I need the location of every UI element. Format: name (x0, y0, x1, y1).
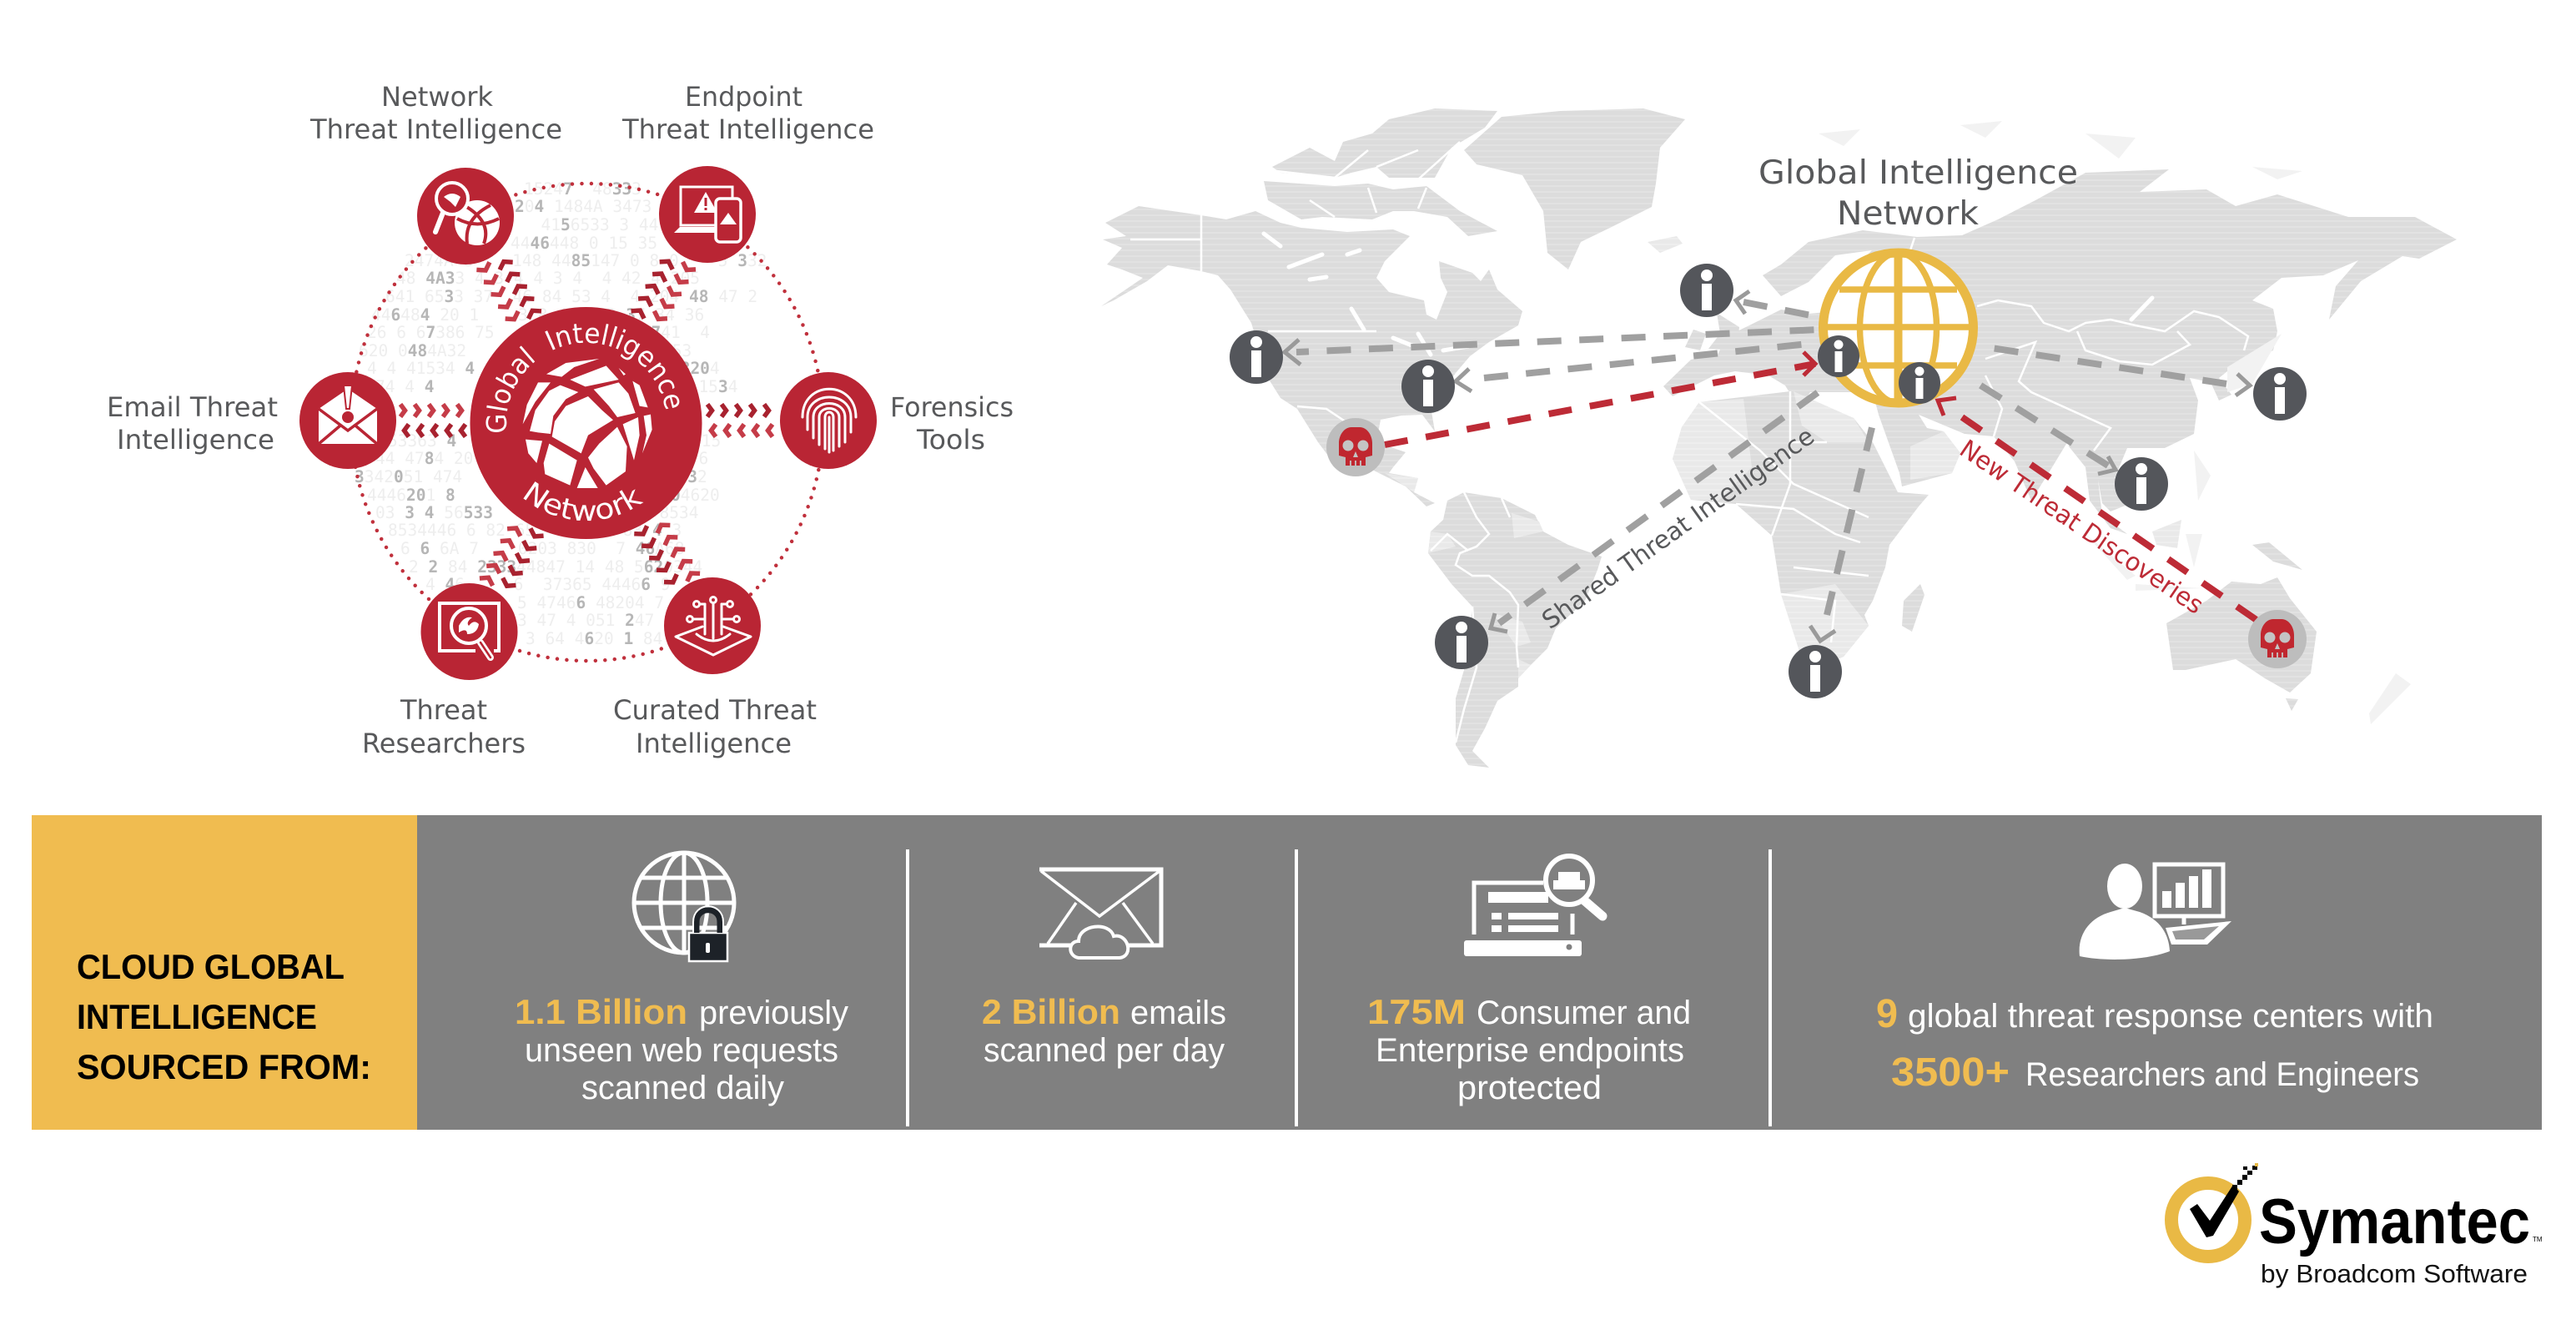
text: 2 Billion (982, 992, 1226, 1069)
label: Network Threat Intelligence: Threat Intelligence (309, 113, 562, 145)
background digit pattern: 6 6 6A 7 0203 830 7 46A68 (400, 539, 684, 558)
text: 2 Billion: emails (1130, 995, 1226, 1031)
text: 1.1 Billion: unseen web requests (525, 1032, 838, 1069)
label: Network Threat Intelligence (309, 81, 562, 145)
label: Curated Threat Intelligence (613, 694, 817, 759)
icon: hub globe (523, 359, 652, 488)
arrow label: New Threat Discoveries: New Threat Discoveries (1955, 435, 2209, 621)
label: Curated Threat Intelligence: Intelligence (636, 728, 792, 759)
icon: report with magnifier (440, 603, 499, 657)
background digit pattern: 620 0484A32 3 E205653 (359, 341, 692, 360)
background digit pattern: 15247 48333 (524, 179, 641, 199)
label: Email Threat Intelligence (107, 391, 278, 456)
panel: grey stats band (417, 815, 2542, 1130)
world map (1101, 108, 2457, 768)
stat: web requests (515, 853, 848, 1106)
background digit pattern: 2 2 84 233344847 14 48 5620344 (409, 557, 702, 577)
background digit pattern: 204 1484A 3473 (515, 197, 652, 216)
background digit pattern: 8534446 6 82 65 4 6 8 83 4 3 (388, 521, 682, 540)
text: 9 global threat response centers (1876, 992, 2433, 1095)
heading: Cloud Global Intelligence Sourced From: SOURCED FROM: (77, 1047, 371, 1086)
arrow label: Shared Threat Intelligence: Shared Threat Intelligence (1537, 421, 1820, 636)
stat: endpoints (1367, 856, 1691, 1106)
node: Curated Threat Intelligence (664, 577, 761, 674)
background digit pattern: 53363 4 04 8415 (388, 431, 721, 451)
icon: gold globe (1824, 253, 1974, 403)
label: Network Threat Intelligence: Network (381, 81, 493, 113)
background digit pattern: 4446201 8 4 334734204620 (367, 486, 720, 505)
background digit pattern: 446484 20 1 3 8 4 3 3 37 34 36 (371, 305, 704, 325)
background digit pattern: 74 4 4 03 1534 (375, 377, 737, 396)
background digit pattern: 48 4A33 4 3 4 4 3 4 4 42 4 205 (396, 269, 700, 288)
node: Network Threat Intelligence (417, 168, 514, 264)
label: Forensics Tools: Tools (916, 424, 985, 456)
icon: laptop and phone (674, 187, 741, 242)
logo: Symantec by Broadcom Software: Symantec (2259, 1186, 2530, 1257)
background digit pattern: 03 3 4 56533 44 474 04 8534 (375, 503, 699, 522)
label: Email Threat Intelligence: Email Threat (107, 391, 278, 423)
label: Threat Researchers: Threat (400, 694, 487, 726)
text: 1.1 Billion: 1.1 Billion (515, 992, 687, 1031)
text: 9 global threat response centers: 3500+ (1891, 1050, 2010, 1095)
logo: Symantec by Broadcom Software: by Broadcom Software (2261, 1259, 2528, 1288)
central hub: Global Intelligence Network: Global Intelligence (486, 324, 679, 432)
dotted ring (351, 184, 823, 661)
text: 1.1 Billion: scanned daily (581, 1070, 784, 1106)
node: Endpoint Threat Intelligence (659, 166, 756, 263)
label: Endpoint Threat Intelligence: Threat Intelligence (621, 113, 874, 145)
text: 1.1 Billion (515, 992, 848, 1106)
label: Threat Researchers: Researchers (362, 728, 526, 759)
icon: circuit on platform (676, 597, 751, 655)
central hub: Global Intelligence Network: Network (524, 481, 644, 521)
icon: info markers (1230, 264, 2307, 698)
background digit pattern: 4446448 0 15 35 (511, 234, 657, 253)
icon: envelope with alert (319, 385, 377, 444)
map heading: Global Intelligence Network (1758, 154, 2078, 233)
icon: fingerprint (802, 389, 856, 452)
central hub: Global Intelligence Network (470, 307, 702, 539)
text: 1.1 Billion: previously (699, 995, 848, 1031)
map heading: Global Intelligence Network: Network (1837, 195, 1979, 233)
node: Forensics Tools (780, 372, 877, 469)
icon: threat skull markers (1326, 418, 2307, 668)
arrows: shared threat intelligence (grey dashed) (1285, 291, 2250, 641)
label: Curated Threat Intelligence: Curated Threat (613, 694, 817, 726)
icon: endpoint scan (1464, 856, 1602, 956)
text: 2 Billion: scanned per day (984, 1032, 1225, 1069)
label: Endpoint Threat Intelligence (621, 81, 874, 145)
hub arc text (506, 343, 667, 463)
icon: magnifier and globe (435, 183, 500, 245)
background digit pattern: 4156533 3 44 (521, 215, 658, 234)
label: Forensics Tools: Forensics (890, 391, 1014, 423)
panel: yellow heading (32, 815, 417, 1130)
heading: Cloud Global Intelligence Sourced From (77, 947, 371, 1086)
background digit pattern: 2474A 8 148 4485147 0 8 0 5 332 (405, 251, 767, 270)
icon: envelope with cloud (1039, 869, 1161, 958)
background digit pattern: 4 46 6 37365 44466 9 (425, 575, 671, 594)
background digit pattern: 3 47 4 051 247 (517, 611, 654, 630)
label: Threat Researchers (362, 694, 526, 759)
background digit pattern: 44 4784 20 9 38 4 6 (375, 449, 708, 468)
icon: globe with padlock (634, 853, 734, 961)
icon: check ring (2171, 1163, 2258, 1257)
background digit pattern: 26 6 67386 75 46A686741 4 (367, 323, 710, 342)
text: 2 Billion: 2 Billion (982, 992, 1120, 1031)
background digit pattern: 4 4 41534 4 04153204 (367, 359, 720, 378)
text: 9 global threat response centers: 9 (1876, 992, 1898, 1036)
background digit pattern (355, 179, 767, 648)
logo: Symantec by Broadcom Software (2171, 1163, 2543, 1288)
stat: emails (982, 869, 1226, 1069)
arrows: chevron spokes between sources and hub (400, 252, 772, 596)
label: Email Threat Intelligence: Intelligence (117, 424, 274, 456)
node: Email Threat Intelligence (299, 372, 396, 469)
text: 175M: protected (1457, 1070, 1602, 1106)
arrows: new threat discoveries (red dashed) (1385, 352, 2257, 620)
background digit pattern: 3 64 4620 1 84 (526, 629, 662, 648)
label: Endpoint Threat Intelligence: Endpoint (685, 81, 802, 113)
text: 9 global threat response centers: global threat response centers with (1908, 998, 2433, 1035)
text: 175M: 175M (1367, 992, 1466, 1031)
text: 9 global threat response centers: Researchers and Engineers (2025, 1056, 2419, 1093)
logo: Symantec by Broadcom Software: TM (2533, 1236, 2543, 1243)
icon: analyst at monitor (2080, 864, 2231, 960)
label: Forensics Tools (890, 391, 1014, 456)
text: 175M: Consumer and (1477, 995, 1691, 1031)
background digit pattern: 5 47466 48204 7 (517, 593, 664, 612)
background digit pattern: 641 6533 37 46 84 53 4 4 204 48 47 2 (385, 287, 757, 306)
map heading: Global Intelligence Network: Global Intelligence (1758, 154, 2078, 192)
background digit pattern: 3342051 474 4A 8 1 32 (355, 467, 707, 486)
heading: Cloud Global Intelligence Sourced From: CLOUD GLOBAL (77, 947, 345, 986)
text: 175M (1367, 992, 1691, 1106)
stat: response centers (1876, 864, 2433, 1095)
text: 175M: Enterprise endpoints (1376, 1032, 1684, 1069)
heading: Cloud Global Intelligence Sourced From: INTELLIGENCE (77, 997, 317, 1036)
node: Threat Researchers (420, 583, 517, 680)
